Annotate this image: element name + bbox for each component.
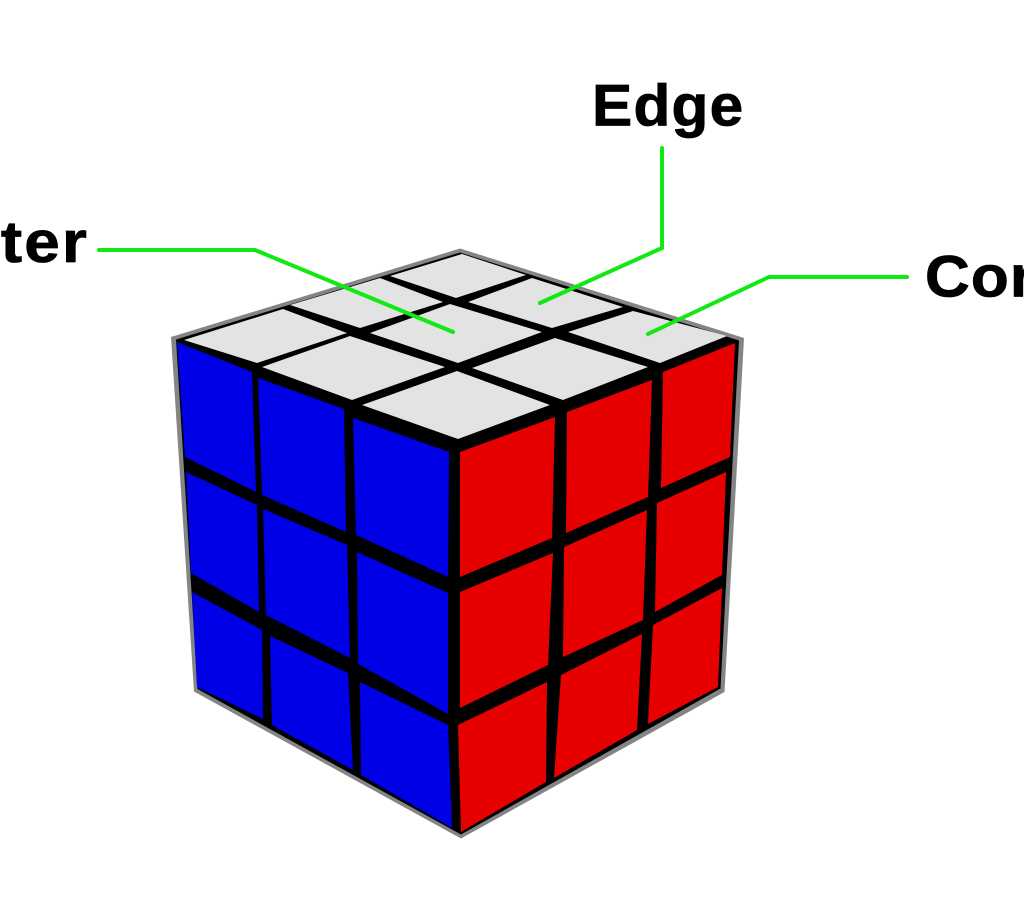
cube xyxy=(171,248,744,838)
cube body xyxy=(176,252,739,834)
callout line: edge xyxy=(540,148,662,303)
callout line: corner xyxy=(648,277,907,334)
right face: red stickers xyxy=(458,343,735,832)
left face: blue stickers xyxy=(177,342,452,828)
callout line: center xyxy=(99,250,453,332)
label: Edge: Edge xyxy=(592,73,744,138)
top face: white stickers xyxy=(184,254,727,439)
cube outline xyxy=(171,248,744,838)
